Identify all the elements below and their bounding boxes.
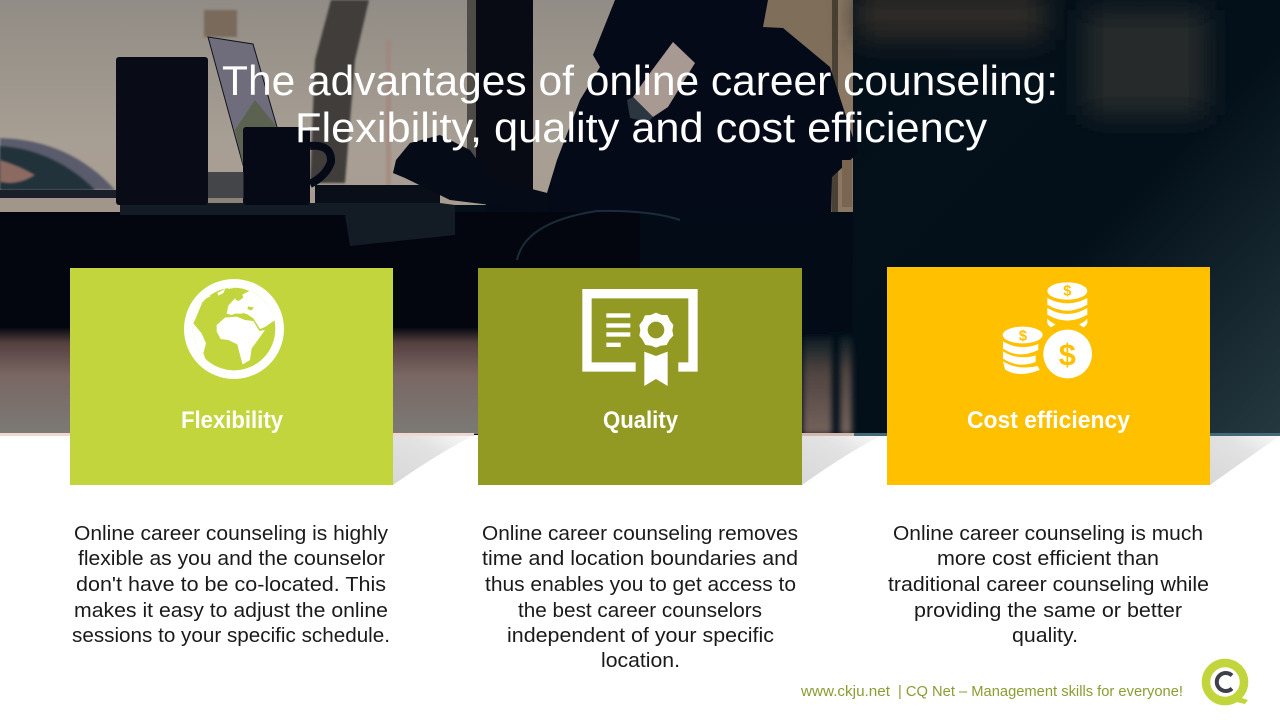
panel: flexibility — [70, 268, 393, 485]
text block: cost efficiency description: traditional career counseling while — [888, 573, 1209, 596]
icon: coins: $ — [1059, 338, 1076, 372]
title: Flexibility, quality and cost efficiency — [295, 104, 987, 151]
title — [222, 57, 1058, 151]
text block: flexibility description: don't have to be co-located. This — [76, 573, 386, 596]
footer text: | CQ Net – Management skills for everyone! — [898, 684, 1183, 700]
text block: quality description: independent of your specific — [507, 624, 774, 647]
text block: flexibility description: sessions to your specific schedule. — [72, 624, 390, 647]
text block: cost efficiency description: Online career counseling is much — [893, 522, 1203, 545]
text block: flexibility description: Online career counseling is highly — [74, 522, 389, 545]
heading: Cost efficiency: Cost efficiency — [967, 407, 1131, 434]
text block: quality description: time and location boundaries and — [482, 547, 798, 570]
heading: Quality: Quality — [603, 407, 679, 434]
text block: quality description: Online career counseling removes — [482, 522, 798, 545]
text block: cost efficiency description — [888, 522, 1209, 647]
title: The advantages of online career counseling: — [222, 57, 1058, 104]
footer text: www.ckju.net — [800, 684, 890, 700]
icon: coins: $ — [1063, 284, 1071, 300]
background photo: person working at a laptop — [0, 0, 1280, 436]
icon: CQ logo — [1206, 663, 1248, 704]
card shadows — [393, 436, 1280, 485]
icon: coins — [1003, 282, 1094, 380]
text block: quality description — [482, 522, 798, 672]
text block: cost efficiency description: providing the same or better — [914, 599, 1182, 622]
panel: quality — [478, 268, 802, 485]
text block: quality description: location. — [601, 649, 680, 672]
text block: flexibility description — [72, 522, 390, 647]
panel: cost efficiency — [887, 267, 1210, 485]
text block: flexibility description: makes it easy to adjust the online — [74, 599, 388, 622]
text block: cost efficiency description: more cost efficient than — [937, 547, 1159, 570]
laptop, speaker and mug silhouettes — [116, 37, 547, 212]
icon: certificate — [582, 289, 698, 386]
icon: coins: $ — [1019, 328, 1027, 344]
text block: flexibility description: flexible as you and the counselor — [78, 547, 385, 570]
icon: globe — [183, 279, 284, 379]
text block: quality description: the best career counselors — [518, 599, 762, 622]
heading: Flexibility: Flexibility — [181, 407, 284, 434]
text block: quality description: thus enables you to get access to — [485, 573, 796, 596]
text block: cost efficiency description: quality. — [1012, 624, 1078, 647]
